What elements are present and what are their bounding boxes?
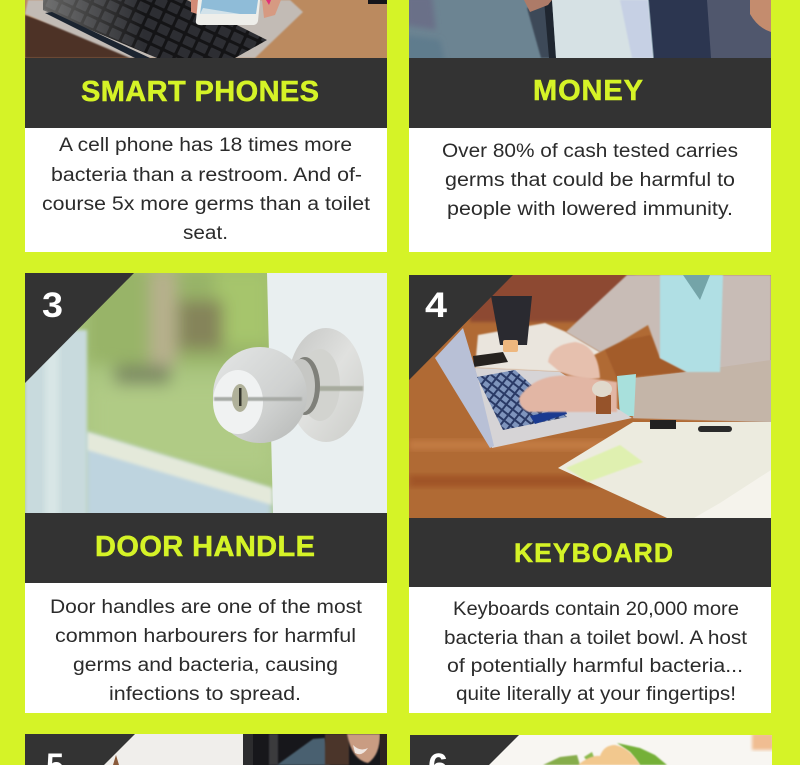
photo: smiling person	[104, 734, 387, 765]
number badge: 3	[42, 286, 63, 325]
text block: germs that could be harmful to	[445, 170, 735, 191]
panel: item 6	[410, 733, 774, 765]
hands and watch	[548, 342, 600, 380]
text block: quite literally at your fingertips!	[456, 684, 736, 705]
text block: Door handles are one of the most	[50, 597, 363, 618]
panel: keyboard	[409, 270, 771, 713]
heading bar	[25, 58, 387, 128]
photo: person typing on a laptop	[409, 270, 771, 518]
text block	[25, 583, 387, 713]
shirt	[660, 275, 723, 372]
panel: item 5	[25, 734, 387, 765]
icon: phone on desk	[473, 352, 508, 367]
text block: people with lowered immunity.	[447, 199, 733, 220]
text block: germs and bacteria, causing	[73, 655, 338, 676]
text block: common harbourers for harmful	[55, 626, 356, 647]
text block: infections to spread.	[109, 684, 301, 705]
text block: bacteria than a restroom. And of-	[51, 165, 362, 186]
panel: smart phones	[25, 0, 387, 252]
sweater	[566, 275, 771, 422]
number badge	[409, 275, 513, 380]
text block: seat.	[183, 223, 228, 244]
photo: people in suits	[405, 0, 771, 62]
door knob neck	[299, 357, 320, 415]
text block	[409, 128, 771, 252]
laptop	[475, 368, 632, 448]
text block: of potentially harmful bacteria...	[447, 656, 743, 677]
text block	[409, 587, 771, 713]
text block: A cell phone has 18 times more	[59, 135, 352, 156]
icon: door knob rose	[288, 328, 364, 442]
text block	[25, 128, 387, 252]
text block: Over 80% of cash tested carries	[442, 141, 738, 162]
heading: DOOR HANDLE	[95, 531, 315, 563]
panel: door handle	[25, 265, 387, 713]
icon: door knob	[213, 347, 307, 443]
heading bar	[409, 58, 771, 128]
heading bar	[25, 513, 387, 583]
number badge	[410, 735, 519, 765]
photo: salad dish	[489, 735, 772, 765]
number badge	[25, 273, 134, 383]
heading bar	[409, 518, 771, 587]
text block: bacteria than a toilet bowl. A host	[444, 628, 748, 649]
text block: course 5x more germs than a toilet	[42, 194, 371, 215]
panel: money	[405, 0, 771, 252]
photo: laptop and phone on a wooden desk	[25, 0, 387, 58]
heading: SMART PHONES	[81, 76, 319, 108]
icon: cup	[491, 296, 532, 345]
photo: door knob	[25, 265, 387, 520]
text block: Keyboards contain 20,000 more	[453, 599, 739, 620]
number badge	[25, 734, 135, 765]
number badge: 4	[425, 286, 448, 325]
heading: MONEY	[533, 75, 643, 107]
heading: KEYBOARD	[514, 538, 673, 568]
icon: open book	[558, 422, 771, 518]
